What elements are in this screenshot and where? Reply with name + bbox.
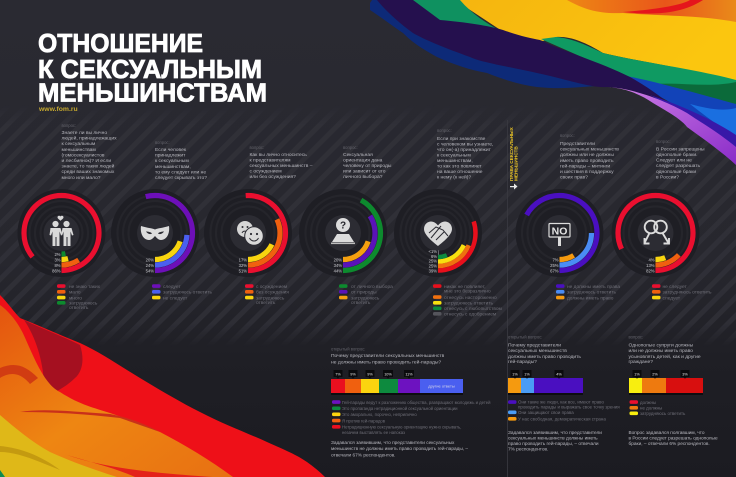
value tags: 1% xyxy=(524,372,530,376)
legend xyxy=(556,284,620,302)
value tags xyxy=(334,370,414,379)
icon: heart handshake xyxy=(424,222,452,246)
question text: ориентация дана xyxy=(343,158,383,164)
question text: Представители xyxy=(560,141,595,147)
title xyxy=(38,28,267,108)
question text: вопрос: xyxy=(560,133,575,138)
title: ОТНОШЕНИЕ xyxy=(38,28,203,58)
question text xyxy=(331,346,445,366)
legend: затрудняюсь ответить xyxy=(567,291,617,296)
legend: никак не повлияет, xyxy=(444,285,486,290)
value tags: 9% xyxy=(367,372,373,376)
legend: не должны иметь права xyxy=(567,285,620,290)
legend: следует xyxy=(163,285,181,290)
panel: question 2 xyxy=(111,140,213,302)
question text: вопрос: xyxy=(437,128,452,133)
rainbow flag: top right xyxy=(370,0,736,165)
percentages: 4% xyxy=(648,258,655,262)
question text xyxy=(250,145,313,180)
percentages: 39% xyxy=(429,268,437,274)
percentages xyxy=(334,258,342,274)
legend: затрудняюсь ответить xyxy=(163,291,213,296)
percentages: 20% xyxy=(334,258,342,262)
legend xyxy=(630,400,686,416)
value tags: 9% xyxy=(350,372,356,376)
question text: иметь право проводить xyxy=(560,159,614,164)
question text: и лесбиянок)? И если xyxy=(62,158,111,164)
question text: принадлежит xyxy=(155,154,186,159)
stacked bar xyxy=(331,379,463,395)
legend: много xyxy=(69,296,82,302)
percentages xyxy=(52,252,61,274)
panel: why no parades xyxy=(331,346,491,458)
legend: с осуждением xyxy=(256,285,287,290)
question text: Если при знакомстве xyxy=(437,136,486,142)
donut chart xyxy=(111,189,199,277)
value tags xyxy=(510,370,564,379)
question text: в России? xyxy=(656,174,679,180)
question text: личного выбора? xyxy=(343,174,383,180)
percentages xyxy=(428,249,437,274)
note: сексуальных меньшинств должны иметь xyxy=(508,436,598,442)
value tags: 1% xyxy=(634,372,640,376)
panel: why parades allowed xyxy=(508,334,620,452)
percentages: 8% xyxy=(54,263,61,268)
question text: В России запрещены xyxy=(656,146,705,152)
question text: к сексуальным xyxy=(437,154,471,158)
question text xyxy=(628,334,701,365)
panel: question 4 xyxy=(299,145,393,306)
question text: к сексуальным xyxy=(62,142,96,147)
question text: на ваше отношение xyxy=(437,170,483,175)
legend: отнесусь настороженно xyxy=(444,296,497,301)
question text: к представителям xyxy=(250,158,291,164)
legend: отнесусь с одобрением xyxy=(444,312,496,318)
value tags: 2% xyxy=(652,372,658,376)
question text: людей, принадлежащих xyxy=(62,135,117,142)
legend: Нетрадиционную сексуальную ориентацию нужно скрывать, xyxy=(342,425,461,430)
stacked bar xyxy=(629,378,703,395)
legend xyxy=(652,284,712,302)
question text: усыновлять детей, как и другие xyxy=(628,353,701,360)
title: К СЕКСУАЛЬНЫМ xyxy=(38,54,262,84)
value tags: 3% xyxy=(682,372,688,376)
legend: без осуждения xyxy=(256,290,289,296)
icon: couple with heart xyxy=(50,216,74,246)
question text xyxy=(508,334,581,365)
question text xyxy=(560,133,619,181)
percentages xyxy=(550,258,559,274)
note xyxy=(628,430,718,447)
question text: меньшинствам xyxy=(62,148,96,153)
question text: и шествия в поддержку xyxy=(560,170,614,175)
legend: Это аморально, порочно, неприлично xyxy=(342,412,417,417)
question text: к сексуальным xyxy=(155,159,189,164)
section heading: rights of sexual minorities xyxy=(509,126,518,181)
percentages: 2% xyxy=(54,252,61,257)
icon: male symbols xyxy=(644,221,669,244)
question text: с человеком вы узнаете, xyxy=(437,142,493,148)
percentages: 3% xyxy=(54,258,61,262)
question text: сексуальных меньшинств – xyxy=(250,164,313,169)
question text: гей-парады? xyxy=(508,358,537,365)
panel: question 6 xyxy=(516,133,620,302)
percentages xyxy=(646,258,655,274)
question text: вопрос: xyxy=(628,334,643,340)
question text: много или мало? xyxy=(62,175,101,181)
value tags: 4% xyxy=(556,372,562,376)
value tags: 10% xyxy=(384,372,392,376)
legend xyxy=(339,284,393,306)
legend: должны xyxy=(640,400,656,405)
note: меньшинств не должны иметь право проводить гей-парады, – xyxy=(331,445,468,452)
question text: должны или не должны xyxy=(560,153,614,158)
percentages: 86% xyxy=(52,268,61,274)
question text: своих прав? xyxy=(560,175,588,181)
question text: граждане? xyxy=(628,359,653,365)
question text xyxy=(155,140,207,181)
question text: Если человек xyxy=(155,147,187,153)
question text: следует разрешать xyxy=(656,164,701,169)
question text: Почему представители xyxy=(508,342,561,348)
diagonal stripe pattern xyxy=(0,188,736,332)
note xyxy=(508,430,602,452)
stacked bar: другие ответы xyxy=(428,384,455,388)
question text: должны иметь право проводить xyxy=(508,355,581,360)
question text: что он(-а) принадлежит xyxy=(437,147,492,153)
question text: среди ваших знакомых xyxy=(62,170,115,175)
percentages: 17% xyxy=(239,258,247,262)
stacked bar xyxy=(508,378,583,395)
legend: от личного выбора xyxy=(351,284,393,290)
question text: вопрос: xyxy=(343,145,358,150)
panel: question 7 xyxy=(612,139,712,302)
icon: person with question mark: ? xyxy=(340,220,346,232)
panel: question 3 xyxy=(204,145,313,306)
percentages: 20% xyxy=(146,258,154,262)
donut chart xyxy=(299,189,387,277)
question text: Следует или не xyxy=(656,158,692,164)
note: право проводить гей-парады, – отвечали xyxy=(508,440,599,447)
legend: ответить xyxy=(69,306,89,311)
legend xyxy=(433,284,502,318)
question text: знаете, то таких людей xyxy=(62,163,115,170)
question text: или не должны иметь право xyxy=(628,349,693,354)
legend: Они такие же люди, как все, имеют право xyxy=(518,400,604,404)
question text: однополые браки. xyxy=(656,152,697,158)
legend: Они защищают свои права xyxy=(518,410,574,415)
rainbow flag: bottom left xyxy=(0,295,325,477)
value tags: 7% xyxy=(335,372,341,376)
question text: человеку от природы xyxy=(343,164,392,169)
section heading: rights of sexual minorities: МЕНЬШИНСТВ xyxy=(514,146,518,181)
question text: Как вы лично относитесь xyxy=(250,152,307,158)
percentages: 6% xyxy=(431,254,437,259)
legend: не должны xyxy=(640,406,662,411)
legend: затрудняюсь ответить xyxy=(444,302,494,307)
icon: two faces xyxy=(237,221,263,245)
question text: Сексуальная xyxy=(343,152,373,158)
legend: от природы xyxy=(351,291,377,296)
percentages: 32% xyxy=(239,263,247,268)
percentages: 82% xyxy=(646,268,655,274)
question text: гей-парады – митинги xyxy=(560,162,610,169)
percentages: 25% xyxy=(429,258,437,264)
question text xyxy=(437,128,493,180)
value tags: 1% xyxy=(512,372,518,376)
legend: незачем выставлять ее напоказ xyxy=(342,430,405,435)
value tags xyxy=(632,370,690,379)
value tags: 11% xyxy=(405,372,413,376)
legend: затрудняюсь xyxy=(69,302,98,306)
legend: мало xyxy=(69,291,81,296)
legend: У нас свободная, демократическая страна xyxy=(518,416,606,422)
legend: ответить xyxy=(256,301,276,306)
question text xyxy=(656,139,705,180)
percentages: 7% xyxy=(552,258,559,262)
note: Вопрос задавался полгавшим, что xyxy=(628,430,705,436)
question text: открытый вопрос: xyxy=(508,334,542,340)
question text: к нему (к ней)? xyxy=(437,174,471,180)
legend: затрудняюсь ответить xyxy=(662,291,712,296)
panel: question 5 xyxy=(394,128,502,318)
note: браки, – отвечали 6% респондентов. xyxy=(628,441,710,447)
question text xyxy=(343,145,392,180)
note xyxy=(331,440,468,458)
question text: следует скрывать это? xyxy=(155,175,207,181)
legend xyxy=(152,284,213,302)
legend: затрудняюсь xyxy=(351,296,380,302)
question text: однополые браки xyxy=(656,169,696,175)
legend: отнесусь с любопытством xyxy=(444,306,502,312)
question text: Почему представители сексуальных меньшинств xyxy=(331,353,445,359)
icon: protest sign: NO xyxy=(552,226,567,238)
icon: section arrow xyxy=(510,184,518,190)
percentages: <1% xyxy=(428,249,437,254)
legend: не следует xyxy=(163,296,188,302)
percentages: 34% xyxy=(334,263,342,268)
legend: мне это безразлично xyxy=(444,288,491,294)
question text: вопрос: xyxy=(62,123,76,128)
percentages xyxy=(146,258,154,274)
percentages: 51% xyxy=(239,268,247,274)
note: Задавался заявившим, что представители сексуальных xyxy=(331,440,455,446)
donut chart xyxy=(18,189,106,277)
legend xyxy=(57,284,101,311)
note: 7% респондентов. xyxy=(508,446,548,452)
panel: adoption xyxy=(628,334,718,447)
question text: вопрос: xyxy=(656,139,671,144)
legend: затрудняюсь xyxy=(256,296,285,302)
percentages: 25% xyxy=(429,264,437,268)
question text: вопрос: xyxy=(155,140,170,145)
note: в России следует разрешать однополые xyxy=(628,436,718,442)
question text: не должны иметь право проводить гей-парады? xyxy=(331,358,441,366)
legend: затрудняюсь ответить xyxy=(640,411,686,416)
title: МЕНЬШИНСТВАМ xyxy=(38,78,267,108)
donut chart xyxy=(394,189,482,277)
question text: или без осуждения? xyxy=(250,174,296,180)
question text: Знаете ли вы лично xyxy=(62,130,107,136)
legend xyxy=(332,400,491,435)
legend: Я против гей-парадов xyxy=(342,418,386,424)
legend: проводить парады и выражать свое точку зрения xyxy=(518,404,620,410)
percentages: 54% xyxy=(146,268,154,274)
percentages: 24% xyxy=(146,263,154,268)
question text: то как это повлияет xyxy=(437,164,482,170)
percentages: 44% xyxy=(334,268,342,274)
percentages: 13% xyxy=(646,263,655,268)
legend: не знаю таких xyxy=(69,285,101,290)
question text: открытый вопрос: xyxy=(331,346,365,352)
question text: сексуальных меньшинств xyxy=(560,148,619,153)
legend: Гей-парады ведут к разложению общества, развращают молодежь и детей xyxy=(342,400,491,405)
donut chart xyxy=(516,189,604,277)
question text: (гомосексуалистов xyxy=(62,152,105,158)
legend: должны иметь право xyxy=(567,296,614,302)
question text: или зависит от его xyxy=(343,170,386,174)
section heading: rights of sexual minorities: ПРАВА СЕКСУАЛЬНЫХ xyxy=(509,126,514,181)
legend: Это пропаганда нетрадиционной сексуальной ориентации xyxy=(342,406,458,411)
question text: меньшинствам, xyxy=(155,165,191,170)
panel: question 1 xyxy=(18,123,117,311)
legend: следует xyxy=(662,296,681,302)
question text: то ему следует или не xyxy=(155,170,206,175)
percentages xyxy=(239,258,247,274)
question text: вопрос: xyxy=(250,145,264,150)
legend: не следует xyxy=(662,285,688,290)
question text: с осуждением xyxy=(250,170,282,174)
question text: меньшинствам, xyxy=(437,159,473,164)
donut chart xyxy=(612,189,700,277)
question text xyxy=(62,123,117,181)
section divider xyxy=(506,120,509,477)
question text: Однополые супруги должны xyxy=(628,342,694,348)
donut chart xyxy=(204,189,292,277)
percentages: 25% xyxy=(550,263,559,268)
legend xyxy=(245,284,289,306)
legend: ответить xyxy=(351,301,371,306)
note: Задавался заявившим, что представители xyxy=(508,430,602,436)
question text: сексуальных меньшинств xyxy=(508,349,567,354)
note: отвечали 67% респондентов. xyxy=(331,452,396,458)
percentages: 67% xyxy=(550,268,559,274)
legend xyxy=(508,400,620,422)
icon: mask xyxy=(141,226,169,240)
website link: www.fom.ru xyxy=(38,106,78,113)
